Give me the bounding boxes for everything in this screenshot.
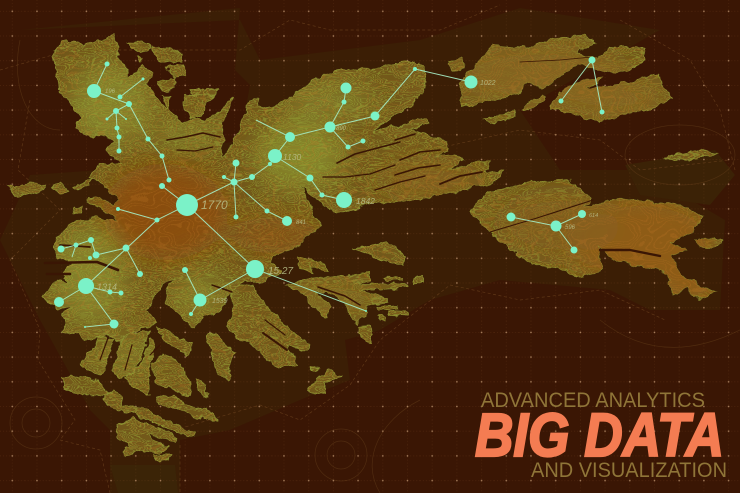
heading: advanced analytics: ADVANCED ANALYTICS: [481, 389, 705, 412]
title block: [475, 389, 727, 482]
network links: [59, 60, 602, 327]
node value labels: 596: [565, 225, 576, 231]
node value labels: 614: [589, 213, 598, 219]
node value labels: 15.27: [268, 266, 293, 277]
network nodes: [54, 56, 604, 328]
node value labels: 1022: [480, 80, 496, 87]
node value labels: 890: [336, 126, 347, 132]
greener ridge regions: [52, 63, 375, 375]
node value labels: 196: [105, 89, 116, 95]
node value labels: [97, 80, 598, 305]
node value labels: 1842: [356, 196, 375, 206]
node value labels: 841: [296, 220, 306, 226]
node value labels: 1539: [212, 298, 228, 305]
fjords: [45, 57, 660, 370]
heading: and visualization: AND VISUALIZATION: [531, 459, 727, 482]
tonal regions: [103, 43, 720, 320]
node value labels: 1314: [97, 282, 117, 292]
node value labels: 1770: [201, 198, 228, 212]
node value labels: 1130: [283, 152, 302, 162]
